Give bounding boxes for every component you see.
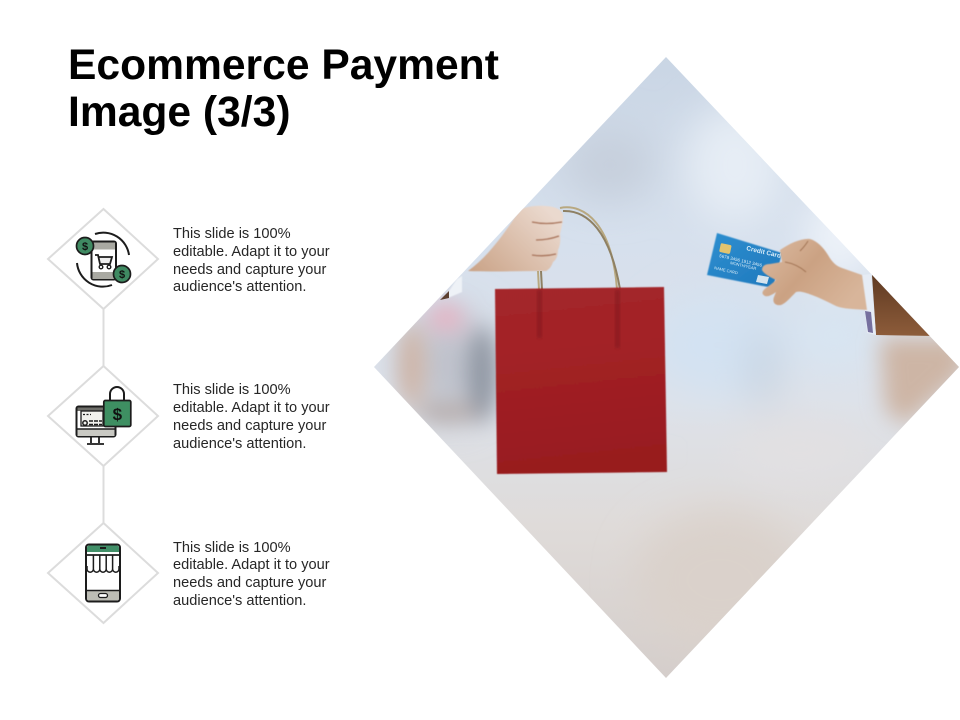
red shopping bag — [495, 287, 667, 474]
text block 2: This slide is 100% — [173, 382, 291, 398]
icon: monitor with dollar bag: $ — [113, 405, 123, 424]
blurred shop background — [370, 50, 960, 685]
icon: phone with cart and coins: $ — [119, 269, 125, 281]
diamond photo: hands exchanging shopping bag and credit card — [370, 50, 960, 685]
connector line: first to second diamond — [102, 309, 104, 366]
text block 1: needs and capture your — [173, 262, 326, 278]
credit card: NAME CARD — [714, 265, 738, 275]
text block 2: needs and capture your — [173, 418, 326, 434]
title: Ecommerce Payment — [68, 41, 499, 89]
text block 3: This slide is 100% — [173, 540, 291, 556]
text block 3: audience's attention. — [173, 593, 306, 609]
text block 3 — [173, 540, 330, 609]
item 3: mobile storefront — [48, 523, 330, 623]
text block 1 — [173, 226, 330, 295]
item 1: phone cart payment — [48, 209, 330, 309]
text block 3: needs and capture your — [173, 575, 326, 591]
bag handles — [538, 207, 620, 290]
text block 1: This slide is 100% — [173, 226, 291, 242]
text block 2 — [173, 382, 330, 452]
connector line: second to third diamond — [102, 466, 104, 523]
diamond frame 1 — [48, 209, 158, 309]
text block 3: editable. Adapt it to your — [173, 557, 330, 573]
right-hand cuff and dark sleeve — [862, 274, 935, 336]
text block 2: audience's attention. — [173, 436, 306, 452]
title — [68, 41, 499, 136]
icon: monitor with dollar bag — [76, 387, 131, 444]
left hand and cuff — [440, 206, 563, 300]
diamond frame 2 — [48, 366, 158, 466]
credit card: Credit Card — [746, 245, 782, 260]
icon: phone with cart and coins: $ — [82, 241, 88, 253]
title: Image (3/3) — [68, 88, 291, 136]
text block 1: audience's attention. — [173, 279, 306, 295]
icon: phone storefront — [86, 544, 120, 602]
credit card — [707, 233, 782, 288]
credit card: 5678 3456 1912 3456 — [719, 253, 763, 268]
credit card: MONTH/YEAR — [730, 260, 757, 271]
diamond frame 3 — [48, 523, 158, 623]
right hand holding card — [762, 239, 867, 310]
icon: phone with cart and coins — [76, 233, 130, 287]
text block 2: editable. Adapt it to your — [173, 400, 330, 416]
item 2: computer and shopping bag — [48, 366, 330, 466]
text block 1: editable. Adapt it to your — [173, 244, 330, 260]
